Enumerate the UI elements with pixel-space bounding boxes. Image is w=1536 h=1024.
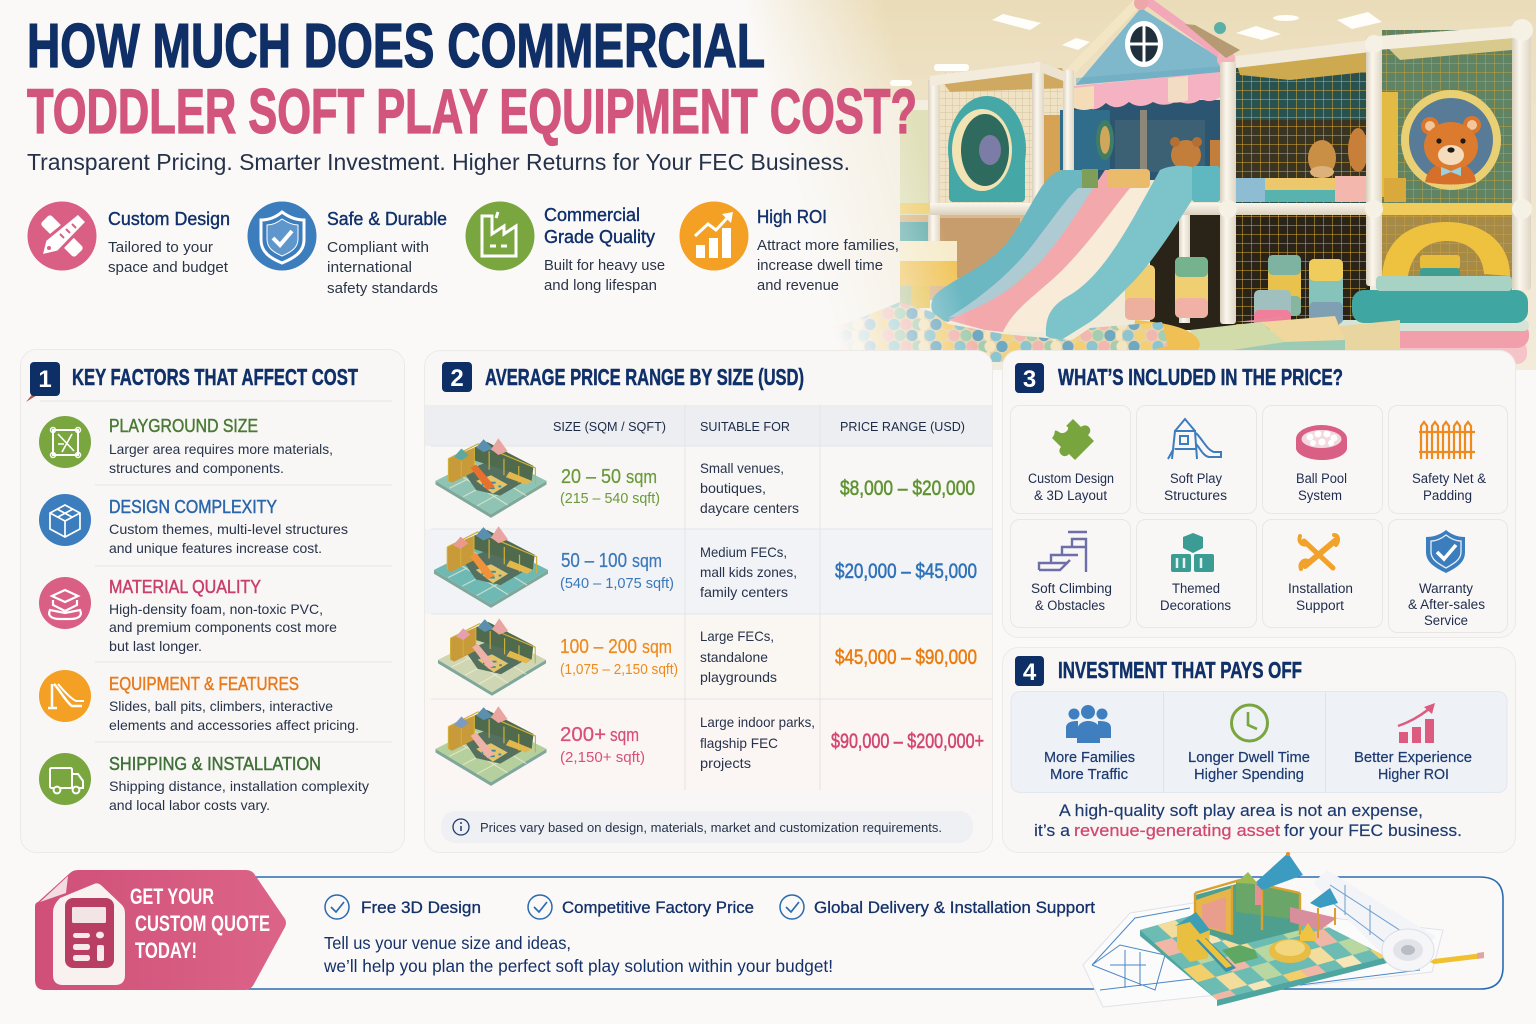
badge 4: 4 xyxy=(1023,659,1037,686)
yellow arch xyxy=(1382,222,1510,281)
quote message: Tell us your venue size and ideas, xyxy=(324,933,571,953)
benefit: more families: More Traffic xyxy=(1050,767,1128,783)
feature: safe and durable xyxy=(248,202,447,297)
foam steps xyxy=(1327,276,1529,364)
row: 50-100 sqm: sqm xyxy=(632,551,662,571)
feature: safe and durable: Safe & Durable xyxy=(327,208,447,229)
blueprint roll xyxy=(1313,870,1436,971)
row: 200+ sqm: 200+ xyxy=(560,724,606,746)
card: safety net: Padding xyxy=(1423,488,1472,503)
pink quote tag: CUSTOM QUOTE xyxy=(135,911,270,936)
feature: high roi: Attract more families, xyxy=(757,237,899,254)
panel: key factors xyxy=(20,350,404,852)
factor: shipping and installation: and local labor costs vary. xyxy=(109,797,270,813)
row: 200+ sqm: (2,150+ sqft) xyxy=(560,750,645,766)
card: safety net: Safety Net & xyxy=(1412,471,1486,486)
slides xyxy=(931,166,1220,342)
ceiling lights xyxy=(890,12,1382,86)
row: 100-200 sqm: standalone xyxy=(700,649,768,665)
closing statement xyxy=(1034,802,1462,840)
card: custom design: Custom Design xyxy=(1028,471,1114,486)
card: themed decorations: Themed xyxy=(1172,581,1220,596)
row: 100-200 sqm: (1,075 – 2,150 sqft) xyxy=(560,662,678,678)
panel: investment xyxy=(1002,648,1516,852)
feature: high roi: and revenue xyxy=(757,277,839,294)
row: 20-50 sqm: (215 – 540 sqft) xyxy=(560,491,660,507)
heading: INVESTMENT THAT PAYS OFF xyxy=(1058,657,1302,683)
card: ball pool xyxy=(1262,406,1382,514)
card: ball pool: System xyxy=(1298,488,1342,503)
factor: material quality: High-density foam, non-toxic PVC, xyxy=(109,601,323,617)
closing statement: revenue-generating asset xyxy=(1074,822,1280,840)
teal ring window xyxy=(948,96,1026,202)
heading: AVERAGE PRICE RANGE BY SIZE (USD) xyxy=(485,364,804,390)
row: 50-100 sqm: (540 – 1,075 sqft) xyxy=(560,576,674,592)
row: 100-200 sqm: playgrounds xyxy=(700,669,777,685)
bears behind net xyxy=(1170,137,1220,169)
row: 20-50 sqm: daycare centers xyxy=(700,500,799,516)
ball pool xyxy=(842,302,1168,362)
title: TODDLER SOFT PLAY EQUIPMENT COST? xyxy=(27,77,917,147)
subtitle: Transparent Pricing. Smarter Investment. Higher Returns for Your FEC Business. xyxy=(27,149,850,175)
row: 50-100 sqm xyxy=(434,526,977,608)
closing statement: it’s a xyxy=(1034,822,1071,840)
row: 100-200 sqm: sqm xyxy=(642,637,672,657)
card: soft climbing: Soft Climbing xyxy=(1031,581,1112,596)
row: 20-50 sqm: boutiques, xyxy=(700,480,766,496)
icon: blocks xyxy=(1171,533,1214,572)
feature: custom design: Custom Design xyxy=(108,208,230,229)
benefit: roi xyxy=(1354,703,1472,783)
upper blocks xyxy=(1236,178,1265,202)
badge 1: 1 xyxy=(38,366,52,393)
icon: clock xyxy=(1232,705,1268,741)
thumbnail xyxy=(438,618,546,696)
card: custom design: & 3D Layout xyxy=(1034,488,1107,503)
badge 2 xyxy=(442,362,472,392)
badge 2: 2 xyxy=(450,365,464,392)
thumbnail xyxy=(434,526,548,608)
icon: shield xyxy=(248,202,316,270)
icon: bar chart with arrow xyxy=(1398,703,1435,743)
card: soft play structures: Structures xyxy=(1164,488,1227,503)
factor: material quality: and premium components cost more xyxy=(109,619,337,635)
benefit: factory price xyxy=(528,895,754,919)
row: 200+ sqm: sqm xyxy=(610,725,639,745)
card: warranty: & After-sales xyxy=(1408,597,1485,612)
factor: shipping and installation: SHIPPING & INSTALLATION xyxy=(109,754,321,774)
row: 50-100 sqm: Medium FECs, xyxy=(700,544,787,560)
call to action banner xyxy=(35,852,1503,1007)
thumbnail xyxy=(436,706,546,786)
icon: floor plan xyxy=(39,416,91,468)
card: ball pool: Ball Pool xyxy=(1296,471,1347,486)
benefit: roi: Higher ROI xyxy=(1378,767,1449,783)
benefit: dwell time xyxy=(1188,705,1310,783)
closing statement: A high-quality soft play area is not an expense, xyxy=(1059,802,1423,820)
quote message xyxy=(323,933,833,976)
feature: custom design: space and budget xyxy=(108,259,229,276)
row: 50-100 sqm: mall kids zones, xyxy=(700,564,797,580)
feature: custom design xyxy=(28,202,230,276)
play structure xyxy=(1175,852,1338,972)
card: safety net xyxy=(1388,406,1508,514)
icon: shield check xyxy=(1426,530,1465,573)
benefit: more families xyxy=(1044,705,1135,783)
round window xyxy=(1125,21,1163,67)
icon: ball pool xyxy=(1296,425,1347,460)
closing statement: for your FEC business. xyxy=(1284,822,1462,840)
factor: design complexity xyxy=(39,494,348,556)
card: warranty: Service xyxy=(1424,613,1468,628)
row: 200+ sqm: flagship FEC xyxy=(700,735,778,751)
feature: commercial grade: Grade Quality xyxy=(544,226,656,247)
table header: SIZE (SQM / SQFT) xyxy=(553,419,666,434)
row: 20-50 sqm: $8,000 – $20,000 xyxy=(840,477,975,500)
house gable xyxy=(1076,8,1226,85)
icon: calculator xyxy=(53,883,125,985)
title xyxy=(27,12,917,147)
icon: wrench and screwdriver xyxy=(1299,535,1338,569)
icon: people xyxy=(1066,705,1111,743)
card: installation support: Installation xyxy=(1288,581,1353,596)
benefit: free 3d design xyxy=(325,895,481,919)
badge 3 xyxy=(1015,363,1044,393)
icon: factory xyxy=(466,202,534,270)
card: installation support xyxy=(1262,520,1382,628)
row: 50-100 sqm: family centers xyxy=(700,584,788,600)
factor: equipment and features xyxy=(39,670,359,733)
row: 200+ sqm: projects xyxy=(700,755,751,771)
benefit: dwell time: Higher Spending xyxy=(1194,767,1304,783)
factor: playground size xyxy=(39,416,333,476)
heading: WHAT’S INCLUDED IN THE PRICE? xyxy=(1058,364,1343,390)
row: 20-50 sqm xyxy=(436,438,975,518)
card: themed decorations xyxy=(1136,520,1256,628)
table header xyxy=(553,419,965,434)
row: 200+ sqm: $90,000 – $200,000+ xyxy=(831,730,984,753)
feature: high roi: increase dwell time xyxy=(757,257,883,274)
icon: slide xyxy=(39,670,91,722)
row: 20-50 sqm: Small venues, xyxy=(700,460,784,476)
pink quote tag: TODAY! xyxy=(135,938,197,963)
icon: climbing steps xyxy=(1039,532,1087,572)
feature: commercial grade: Built for heavy use xyxy=(544,257,665,274)
floor xyxy=(1134,316,1400,350)
benefit: global delivery: Global Delivery & Installation Support xyxy=(814,898,1095,917)
icon: fence xyxy=(1419,422,1475,459)
factor: material quality xyxy=(39,577,337,654)
icon: play tower xyxy=(1168,419,1221,459)
back nets xyxy=(940,177,1032,203)
thumbnail xyxy=(436,438,546,518)
feature: safe and durable: Compliant with xyxy=(327,239,429,256)
icon: pencil and ruler xyxy=(28,202,96,270)
factor: design complexity: DESIGN COMPLEXITY xyxy=(109,497,277,517)
row: 50-100 sqm: $20,000 – $45,000 xyxy=(835,560,977,583)
pink quote tag xyxy=(35,870,286,990)
feature: safe and durable: international xyxy=(327,259,412,276)
row: 50-100 sqm: 50 – 100 xyxy=(561,550,627,572)
factor: equipment and features: Slides, ball pits, climbers, interactive xyxy=(109,698,333,714)
badge 1 xyxy=(26,362,60,402)
foam columns xyxy=(1125,255,1343,327)
benefit: dwell time: Longer Dwell Time xyxy=(1188,750,1310,766)
lower nets xyxy=(900,215,1042,300)
factor: material quality: MATERIAL QUALITY xyxy=(109,577,261,597)
price note xyxy=(441,811,973,843)
card: soft climbing: & Obstacles xyxy=(1035,598,1105,613)
bear portrait xyxy=(1401,90,1501,190)
feature: commercial grade: and long lifespan xyxy=(544,277,657,294)
factor: shipping and installation: Shipping distance, installation complexity xyxy=(109,778,369,794)
factor: playground size: structures and components. xyxy=(109,460,284,476)
feature: high roi: High ROI xyxy=(757,206,827,227)
icon: growth chart xyxy=(680,202,748,270)
quote message: we’ll help you plan the perfect soft play solution within your budget! xyxy=(323,956,833,976)
row: 20-50 sqm: 20 – 50 xyxy=(561,466,621,488)
pencil xyxy=(1430,952,1484,964)
row: 100-200 sqm: 100 – 200 xyxy=(560,636,637,658)
badge 4 xyxy=(1015,656,1044,686)
card: soft play structures xyxy=(1136,406,1256,514)
row: 100-200 sqm xyxy=(438,618,977,696)
factor: equipment and features: EQUIPMENT & FEATURES xyxy=(109,674,299,694)
feature: custom design: Tailored to your xyxy=(108,239,213,256)
badge 3: 3 xyxy=(1023,366,1036,393)
table header: PRICE RANGE (USD) xyxy=(840,419,965,434)
card: warranty: Warranty xyxy=(1419,581,1473,596)
factor: material quality: but last longer. xyxy=(109,638,202,654)
benefit: roi: Better Experience xyxy=(1354,750,1472,766)
icon: truck xyxy=(39,753,91,805)
left soft blocks xyxy=(900,241,957,308)
price note: Prices vary based on design, materials, market and customization requirements. xyxy=(480,820,942,835)
feature: high roi xyxy=(680,202,899,294)
icon: foam stack xyxy=(39,577,91,629)
table header: SUITABLE FOR xyxy=(700,419,790,434)
factor: design complexity: Custom themes, multi-level structures xyxy=(109,521,348,537)
card: installation support: Support xyxy=(1296,598,1344,613)
card: soft play structures: Soft Play xyxy=(1170,471,1222,486)
factor: playground size: Larger area requires more materials, xyxy=(109,441,333,457)
card: themed decorations: Decorations xyxy=(1160,598,1231,613)
pink quote tag: GET YOUR xyxy=(130,884,214,909)
factor: design complexity: and unique features increase cost. xyxy=(109,540,322,556)
icon: cube xyxy=(39,494,91,546)
benefit: free 3d design: Free 3D Design xyxy=(361,898,481,917)
card: warranty xyxy=(1388,520,1508,632)
row: 200+ sqm: Large indoor parks, xyxy=(700,714,815,730)
benefit: factory price: Competitive Factory Price xyxy=(562,898,754,917)
feature: commercial grade: Commercial xyxy=(544,204,640,225)
factor: equipment and features: elements and accessories affect pricing. xyxy=(109,717,359,733)
factor: shipping and installation xyxy=(39,753,369,813)
panel: price range xyxy=(424,350,992,852)
white tube frame xyxy=(900,19,1533,324)
hero photo: soft play structure xyxy=(700,0,1536,370)
row: 200+ sqm xyxy=(436,706,984,786)
feature: safe and durable: safety standards xyxy=(327,280,438,297)
heading: KEY FACTORS THAT AFFECT COST xyxy=(72,364,358,390)
panel: what's included xyxy=(1002,350,1516,638)
factor: playground size: PLAYGROUND SIZE xyxy=(109,416,258,436)
icon: puzzle xyxy=(1052,419,1094,460)
row: 100-200 sqm: Large FECs, xyxy=(700,628,774,644)
row: 20-50 sqm: sqm xyxy=(626,467,657,487)
title: HOW MUCH DOES COMMERCIAL xyxy=(27,12,765,81)
awning xyxy=(1074,72,1220,110)
card: custom design xyxy=(1010,406,1130,514)
benefit: more families: More Families xyxy=(1044,750,1135,766)
feature: commercial grade xyxy=(466,202,665,294)
card: soft climbing xyxy=(1010,520,1130,628)
row: 100-200 sqm: $45,000 – $90,000 xyxy=(835,646,977,669)
illustration: play set on blueprint xyxy=(1083,852,1484,1007)
